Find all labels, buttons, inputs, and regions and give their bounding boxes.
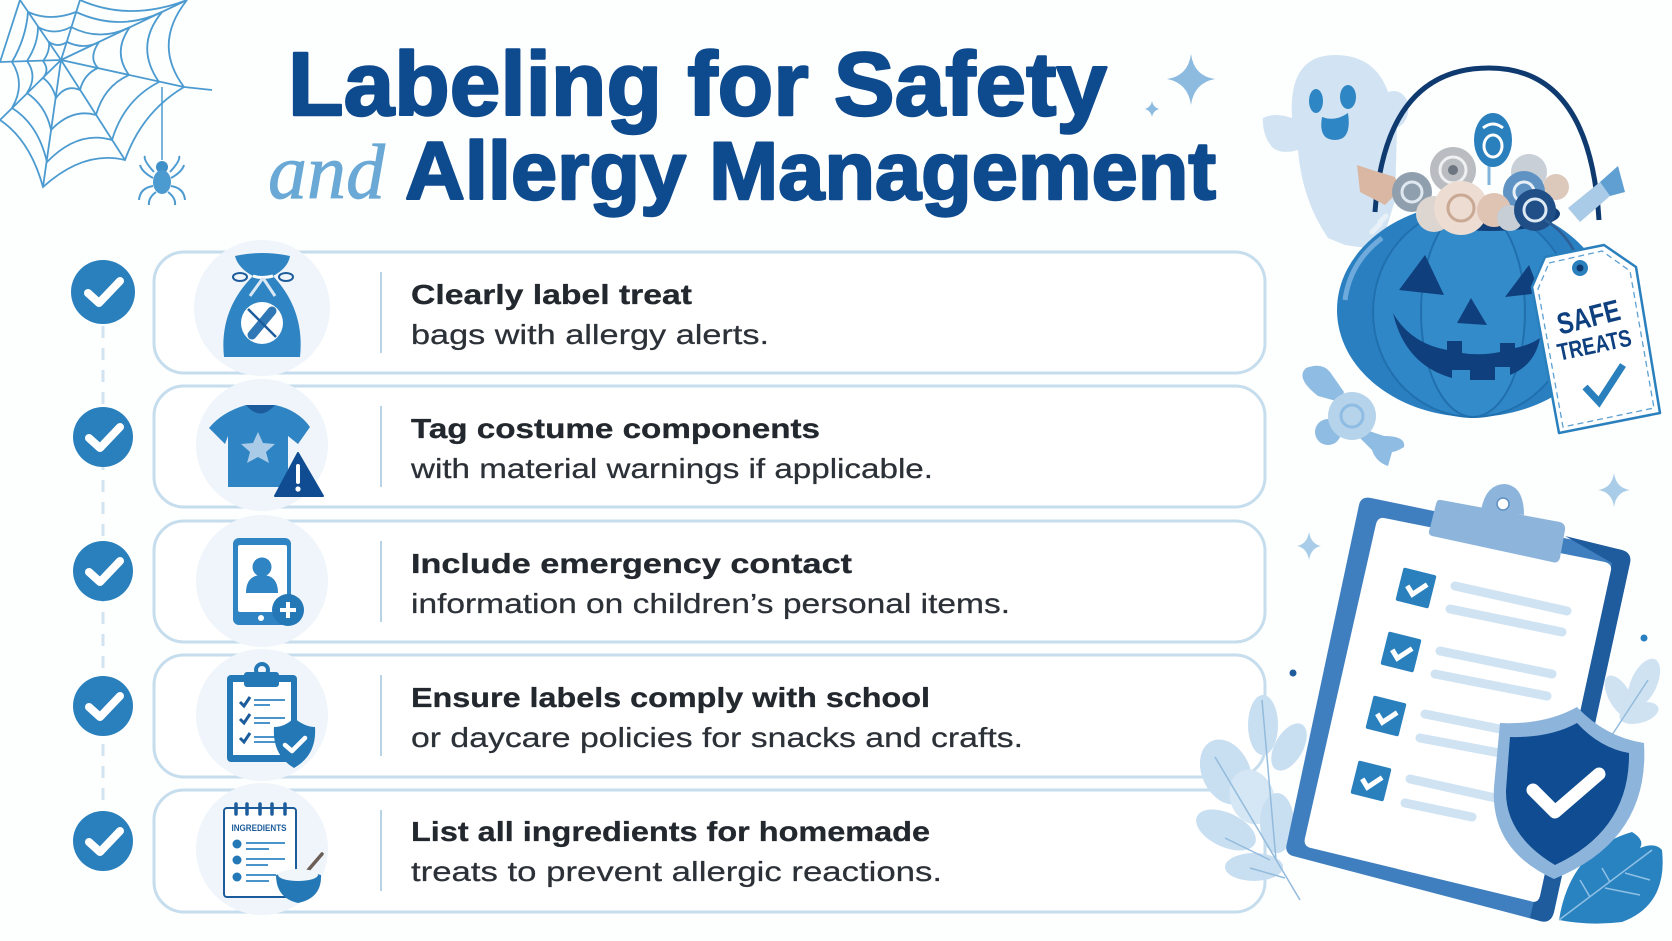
pumpkin opening <box>1420 197 1560 231</box>
title line 1: Labeling for Safety <box>288 35 1107 135</box>
icon: treat bag with peanut alert <box>194 240 330 376</box>
title word: and: and <box>268 128 386 215</box>
decorative leaves left <box>1190 695 1314 900</box>
text: List all ingredients for homemade <box>411 816 930 847</box>
title line 2: Allergy Management <box>405 126 1216 217</box>
clipboard board <box>1286 498 1630 922</box>
decorative leaves right <box>1598 654 1667 735</box>
tag check <box>1585 365 1623 402</box>
icon: costume shirt with warning <box>196 379 328 511</box>
text: information on children’s personal items. <box>411 588 1010 619</box>
handle <box>1375 68 1599 220</box>
checklist row 2 <box>73 379 1265 511</box>
safe treats tag: TREATS <box>1555 325 1634 367</box>
checklist row 3 <box>73 515 1265 647</box>
text <box>410 413 933 484</box>
tag string <box>1545 220 1580 265</box>
text <box>411 816 942 887</box>
text: Clearly label treat <box>411 279 692 310</box>
check badge <box>73 811 133 871</box>
text <box>411 279 769 350</box>
wrapped candy <box>1302 366 1404 466</box>
text: or daycare policies for snacks and crafts. <box>411 722 1023 753</box>
checklist row 4 <box>73 649 1265 781</box>
check boxes <box>1350 567 1437 802</box>
sparkles and dots near clipboard <box>1290 473 1648 676</box>
list lines <box>1405 586 1567 817</box>
shield <box>1494 707 1644 879</box>
text: Tag costume components <box>411 413 820 444</box>
dark leaf <box>1559 832 1663 924</box>
timeline dashed connector <box>102 326 104 810</box>
divider <box>380 406 382 487</box>
spider <box>139 87 185 205</box>
check badge <box>73 541 133 601</box>
card <box>154 790 1265 912</box>
text <box>411 548 1010 619</box>
spider web <box>0 0 212 187</box>
clipboard illustration <box>1286 484 1663 924</box>
check badge <box>73 407 133 467</box>
tag text: SAFE <box>1554 294 1624 342</box>
jack-o-lantern face <box>1393 255 1540 380</box>
icon: ingredients list and bowl <box>196 783 328 915</box>
icon: clipboard with shield <box>196 649 328 781</box>
divider <box>380 541 382 622</box>
checklist row 5 <box>73 783 1265 915</box>
card <box>154 521 1265 642</box>
divider <box>380 675 382 756</box>
safe treats tag <box>1532 245 1660 433</box>
ghost <box>1263 55 1408 250</box>
icon: ingredients list and bowl: INGREDIENTS <box>232 823 286 834</box>
card <box>154 386 1265 507</box>
candies <box>1357 113 1625 235</box>
text: Include emergency contact <box>411 548 852 579</box>
pumpkin treat bucket <box>1337 68 1660 433</box>
card <box>154 252 1265 373</box>
divider <box>380 810 382 891</box>
sparkles near title <box>1145 54 1215 117</box>
text: bags with allergy alerts. <box>411 319 769 350</box>
check badge <box>73 676 133 736</box>
pumpkin body <box>1337 203 1609 417</box>
check badge <box>71 260 135 324</box>
text <box>411 682 1023 753</box>
text: Ensure labels comply with school <box>411 682 930 713</box>
title <box>268 35 1216 217</box>
divider <box>380 272 382 353</box>
clip <box>1429 484 1565 562</box>
icon: phone contact <box>196 515 328 647</box>
clipboard paper <box>1305 518 1611 902</box>
text: with material warnings if applicable. <box>410 453 933 484</box>
text: treats to prevent allergic reactions. <box>411 856 942 887</box>
checklist row 1 <box>71 240 1265 376</box>
card <box>154 655 1265 777</box>
